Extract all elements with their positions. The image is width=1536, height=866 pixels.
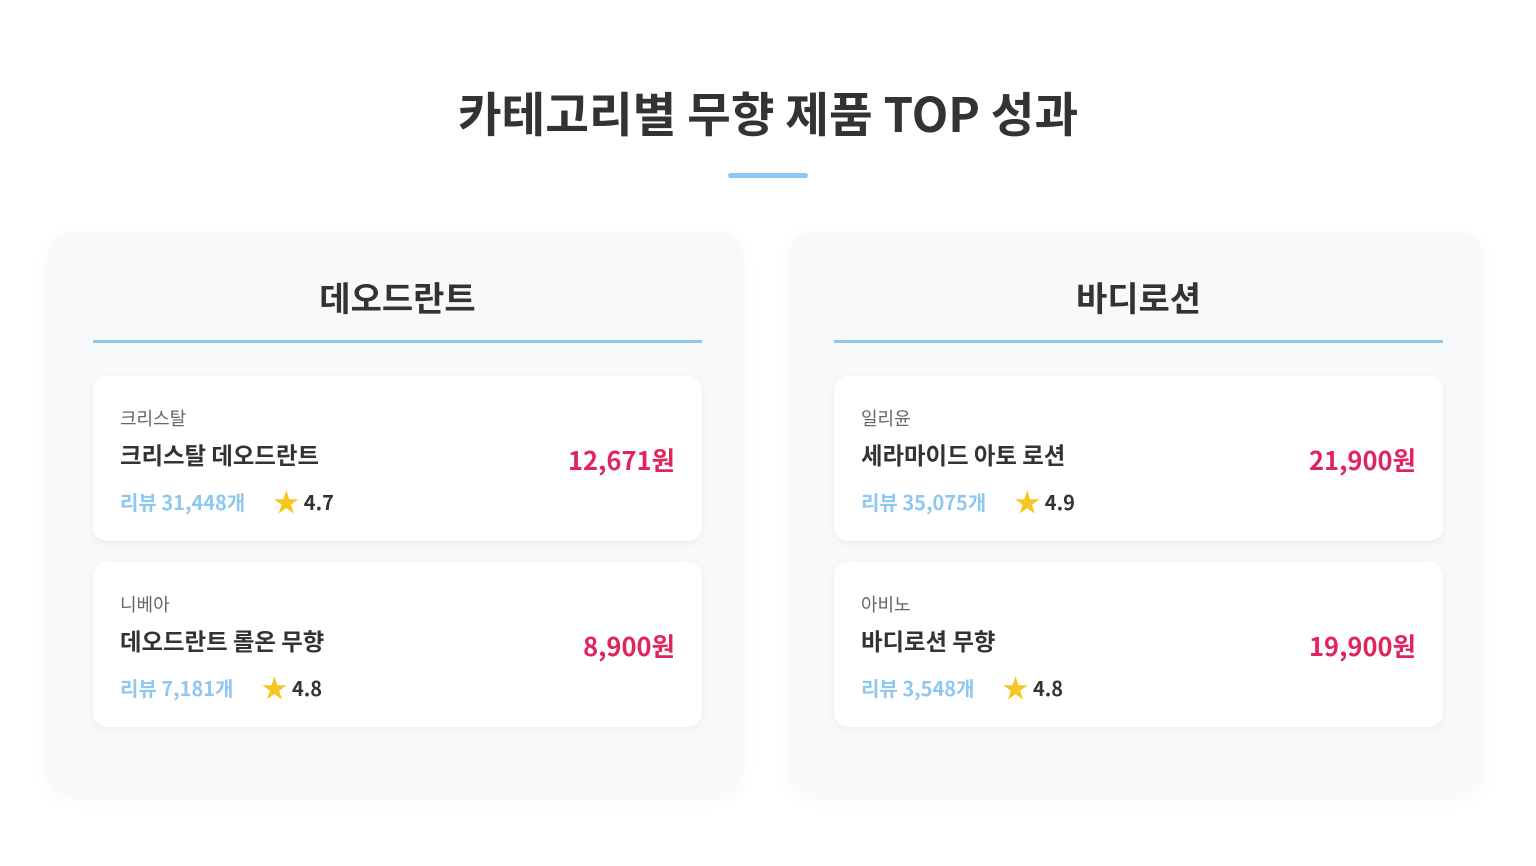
meta: 리뷰 35,075개 ★ 4.9 [861, 483, 1075, 520]
brand: 크리스탈 [120, 405, 186, 431]
brand: 일리윤 [861, 405, 911, 431]
brand: 아비노 [861, 591, 911, 617]
panel heading [93, 272, 702, 343]
price: 19,900원 [1309, 627, 1416, 664]
panel: body lotion [789, 232, 1483, 794]
price: 21,900원 [1309, 441, 1416, 478]
card: aveeno [834, 562, 1443, 727]
meta: 리뷰 7,181개 ★ 4.8 [120, 669, 322, 706]
accent underline [728, 173, 808, 178]
card: crystal [93, 376, 702, 541]
panel heading [834, 272, 1443, 343]
meta: 리뷰 31,448개 ★ 4.7 [120, 483, 334, 520]
card: nivea [93, 562, 702, 727]
product name: 바디로션 무향 [861, 623, 995, 657]
product name: 세라마이드 아토 로션 [861, 437, 1065, 471]
card: illiyoon [834, 376, 1443, 541]
product name: 크리스탈 데오드란트 [120, 437, 319, 471]
title: 카테고리별 무향 제품 TOP 성과 [458, 77, 1078, 146]
price: 8,900원 [583, 627, 675, 664]
brand: 니베아 [120, 591, 170, 617]
price: 12,671원 [568, 441, 675, 478]
product name: 데오드란트 롤온 무향 [120, 623, 324, 657]
panel: deodorant [48, 232, 742, 794]
meta: 리뷰 3,548개 ★ 4.8 [861, 669, 1063, 706]
panel heading: 바디로션 [1076, 272, 1201, 321]
panel heading: 데오드란트 [319, 272, 476, 321]
